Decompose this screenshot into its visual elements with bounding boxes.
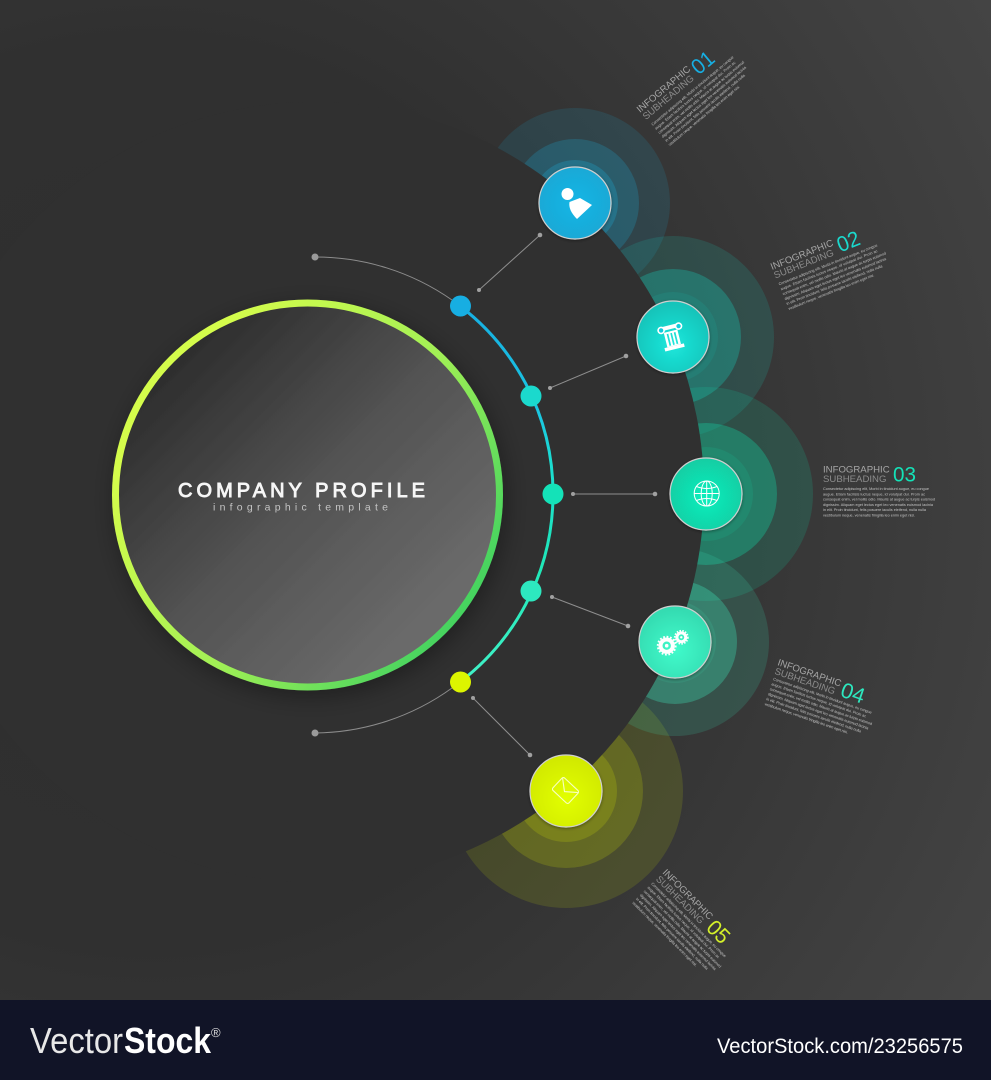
text block 05: SUBHEADING xyxy=(653,874,706,927)
text block 02: INFOGRAPHIC xyxy=(769,238,835,273)
text block 02: dignissim. Aliquam eget lectus eget leo venenatis euismod lacinia xyxy=(784,257,888,301)
footer band xyxy=(0,1000,991,1080)
text block 04: 04 xyxy=(838,678,868,709)
text block 02 xyxy=(768,219,893,311)
footer logo: Vector xyxy=(30,1020,123,1061)
text block 03: SUBHEADING xyxy=(823,474,886,485)
text block 02: SUBHEADING xyxy=(772,248,835,281)
large dark backing disc xyxy=(0,102,704,882)
rings: item 4 xyxy=(581,548,769,736)
text block 01: augue. Etiam facilisis luctus neque, id volutpat dui. Proin ac xyxy=(654,61,737,131)
rings: item 3 xyxy=(599,387,813,601)
text block 01: Consectetur adipiscing elit, Morbi in tincidunt augue, eu congue xyxy=(651,55,735,127)
text block 04: in elit. Proin tincidunt, felis posuere iaculis eleifend, nulla nulla xyxy=(766,697,862,734)
text block 05 xyxy=(631,866,745,980)
text block 05: consequat enim, vel mollis odio. Mauris at augue ac turpis euismod xyxy=(643,889,722,969)
icon circle 1: person xyxy=(539,167,611,239)
footer logo xyxy=(30,1020,221,1061)
icon circle 5: envelope xyxy=(530,755,602,827)
text block 01: SUBHEADING xyxy=(641,73,697,122)
thin gray arcs from main circle xyxy=(312,254,452,736)
timeline nodes xyxy=(450,296,564,692)
text block 04 xyxy=(763,656,883,741)
rings: item 5 xyxy=(449,674,683,908)
main circle xyxy=(116,303,500,687)
text block 05: Consectetur adipiscing elit, Morbi in tincidunt augue, eu congue xyxy=(650,882,727,958)
icon circle 4: gears xyxy=(639,606,711,678)
text block 05: vestibulum neque, venenatis fringilla leo enim eget nisi. xyxy=(631,901,698,967)
footer logo: ® xyxy=(211,1025,221,1040)
rings: item 1 xyxy=(480,108,670,298)
text block 03: consequat enim, vel mollis odio. Mauris at augue ac turpis euismod xyxy=(823,498,935,502)
text block 01: in elit. Proin tincidunt, felis posuere iaculis eleifend, nulla nulla xyxy=(664,73,747,143)
text block 03: dignissim. Aliquam eget lectus eget leo venenatis euismod lacinia xyxy=(823,503,934,507)
text block 02: augue. Etiam facilisis luctus neque, id volutpat dui. Proin ac xyxy=(780,249,878,291)
text block 05: in elit. Proin tincidunt, felis posuere iaculis eleifend, nulla nulla xyxy=(635,897,709,971)
text block 05: dignissim. Aliquam eget lectus eget leo venenatis euismod lacinia xyxy=(639,893,717,972)
text block 04: dignissim. Aliquam eget lectus eget leo venenatis euismod lacinia xyxy=(767,692,870,731)
text block 02: 02 xyxy=(833,226,864,257)
text block 04: SUBHEADING xyxy=(773,666,837,697)
footer logo: Stock xyxy=(124,1020,212,1061)
icon circle 3: globe xyxy=(670,458,742,530)
text block 04: Consectetur adipiscing elit, Morbi in tincidunt augue, eu congue xyxy=(773,677,872,715)
text block 04: vestibulum neque, venenatis fringilla leo enim eget nisi. xyxy=(764,702,848,735)
footer url: VectorStock.com/23256575 xyxy=(717,1035,963,1058)
text block 03: vestibulum neque, venenatis fringilla leo enim eget nisi. xyxy=(823,514,915,518)
title: COMPANY PROFILE xyxy=(178,480,425,502)
text block 04: consequat enim, vel mollis odio. Mauris at augue ac turpis euismod xyxy=(769,687,873,726)
text block 03: Consectetur adipiscing elit, Morbi in tincidunt augue, eu congue xyxy=(823,487,929,491)
timeline arc xyxy=(460,306,553,682)
text block 03: INFOGRAPHIC xyxy=(823,464,890,476)
text block 01: vestibulum neque, venenatis fringilla leo enim eget nisi. xyxy=(668,85,741,147)
connector lines xyxy=(471,233,657,757)
text block 02: in elit. Proin tincidunt, felis posuere iaculis eleifend, nulla nulla xyxy=(786,264,884,306)
text block 01 xyxy=(634,33,755,148)
text block 05: augue. Etiam facilisis luctus neque, id volutpat dui. Proin ac xyxy=(647,886,720,959)
text block 03 xyxy=(823,462,935,518)
text block 04: augue. Etiam facilisis luctus neque, id volutpat dui. Proin ac xyxy=(771,682,867,719)
text block 02: consequat enim, vel mollis odio. Mauris at augue ac turpis euismod xyxy=(782,251,887,296)
text block 02: vestibulum neque, venenatis fringilla leo enim eget nisi. xyxy=(788,273,875,311)
rings: item 2 xyxy=(572,236,774,438)
text block 01: consequat enim, vel mollis odio. Mauris at augue ac turpis euismod xyxy=(658,60,745,135)
text block 02: Consectetur adipiscing elit, Morbi in tincidunt augue, eu congue xyxy=(778,243,878,286)
text block 01: dignissim. Aliquam eget lectus eget leo venenatis euismod lacinia xyxy=(661,65,748,139)
text block 01: 01 xyxy=(686,46,719,79)
subtitle: infographic template xyxy=(213,502,388,514)
text block 04: INFOGRAPHIC xyxy=(776,657,843,690)
text block 03: augue. Etiam facilisis luctus neque, id volutpat dui. Proin ac xyxy=(823,492,925,496)
text block 03: 03 xyxy=(893,462,916,486)
icon circle 2: column xyxy=(637,301,709,373)
text block 01: INFOGRAPHIC xyxy=(635,64,693,115)
text block 05: 05 xyxy=(702,915,735,949)
text block 03: in elit. Proin tincidunt, felis posuere iaculis eleifend, nulla nulla xyxy=(823,508,927,512)
text block 05: INFOGRAPHIC xyxy=(660,867,715,922)
